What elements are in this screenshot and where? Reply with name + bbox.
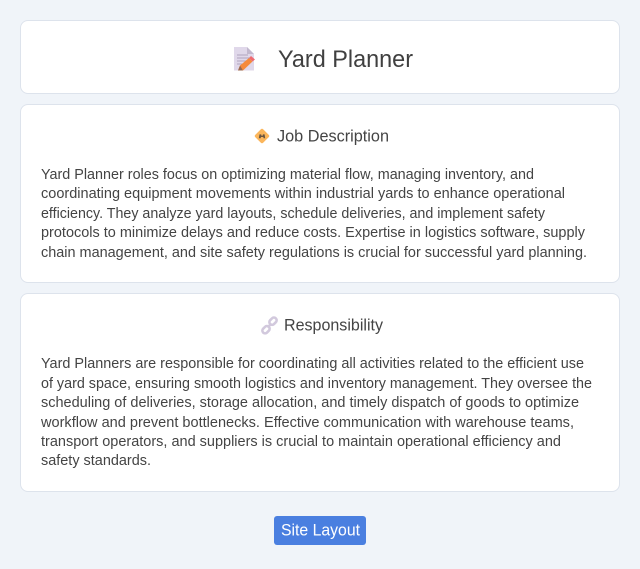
text block: job description: Yard Planner roles focus on optimizing material flow, managing inventory, and [41, 167, 534, 183]
title: Yard Planner [278, 46, 413, 73]
heading: job description: Job Description [277, 128, 389, 146]
text block: responsibility: Yard Planners are responsible for coordinating all activities related to the efficient use [41, 356, 584, 372]
text block: responsibility [40, 356, 592, 469]
text block: job description: coordinating equipment movements within industrial yards to enhance operational [41, 186, 565, 202]
text block: responsibility: safety standards. [41, 453, 151, 469]
heading: responsibility: Responsibility [284, 316, 384, 334]
icon: chain link [261, 316, 278, 335]
panel: job description [20, 104, 620, 283]
button: site layout [274, 516, 366, 545]
text block: job description [41, 167, 587, 261]
panel: title card [20, 20, 620, 94]
text block: responsibility: of yard space, ensuring smooth logistics and inventory management. They oversee the [41, 376, 592, 392]
text block: responsibility: workflow and prevent bottlenecks. Effective communication with warehouse teams, [40, 415, 574, 431]
panel: responsibility [20, 293, 620, 492]
button: site layout: Site Layout [281, 522, 360, 540]
text block: job description: protocols to minimize delays and reduce costs. Expertise in logistics software, supply [41, 225, 586, 241]
text block: responsibility: scheduling of deliveries, storage allocation, and timely dispatch of goods to optimize [41, 395, 579, 411]
text block: job description: chain management, and site safety regulations is crucial for successful yard planning. [41, 245, 587, 261]
icon: document with pencil [234, 47, 255, 70]
icon: road work diamond sign [254, 128, 270, 144]
text block: job description: efficiency. They analyze yard layouts, schedule deliveries, and implement safety [41, 206, 546, 222]
text block: responsibility: transport operators, and suppliers is crucial to maintain operational efficiency and [41, 434, 561, 450]
